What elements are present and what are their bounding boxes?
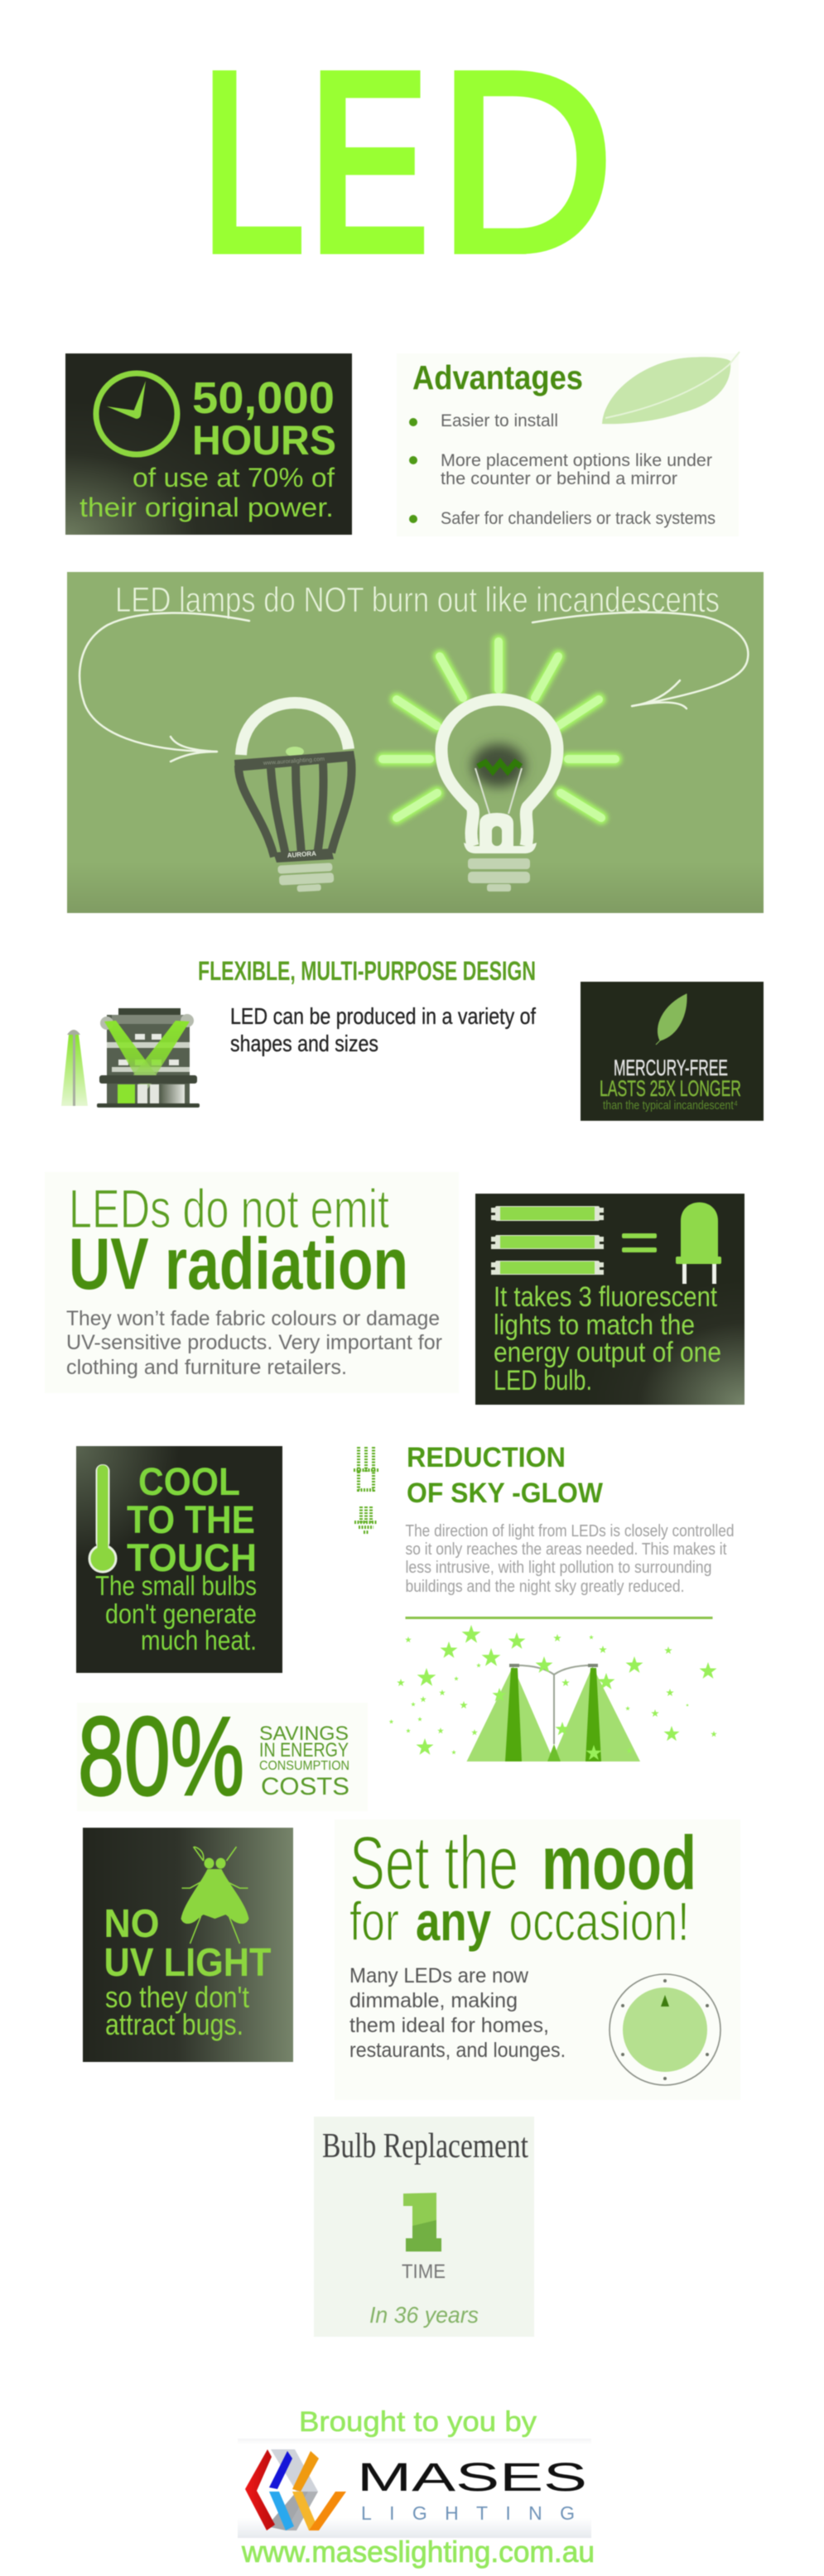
text: savings in energy consumption costs: SAVINGS <box>259 1723 349 1745</box>
text: don't attract bugs: attract bugs. <box>105 2007 243 2041</box>
panel: cool to the touch <box>76 1446 282 1673</box>
heading: for any occasion: occasion! <box>508 1891 689 1952</box>
panel: no UV radiation <box>45 1172 459 1393</box>
text: sky-glow body: less intrusive, with light pollution to surrounding <box>406 1559 712 1577</box>
text: in 36 years: In 36 years <box>369 2302 479 2328</box>
text: dimmable body: Many LEDs are now <box>349 1964 529 1987</box>
heading: no UV light: UV LIGHT <box>104 1941 272 1985</box>
list: advantages: Easier to install <box>441 411 558 430</box>
icon: equals sign <box>622 1233 657 1252</box>
text: UV body <box>66 1307 442 1379</box>
text: don't attract bugs <box>105 1980 249 2041</box>
heading: reduction of sky-glow: REDUCTION <box>407 1442 566 1473</box>
panel: flexible multi-purpose design <box>61 956 536 1108</box>
stat: 50,000 hours: 50,000 <box>192 373 335 423</box>
heading: for any occasion: for <box>349 1891 399 1952</box>
text: small bulbs <box>95 1570 257 1656</box>
stat: 50,000 hours: HOURS <box>192 417 336 464</box>
text: savings in energy consumption costs: COSTS <box>261 1773 349 1800</box>
stat: 80%: 80% <box>78 1694 244 1819</box>
title: LED: E <box>306 12 432 313</box>
list: advantages: More placement options like under <box>441 451 712 470</box>
heading: LEDs do not emit: LEDs do not emit <box>69 1178 389 1239</box>
text: small bulbs: The small bulbs <box>95 1570 257 1601</box>
heading: cool to the touch: COOL <box>138 1459 240 1503</box>
logo mark <box>245 2449 346 2530</box>
text: than the typical incandescent: than the typical incandescent⁴ <box>603 1098 738 1113</box>
text: savings in energy consumption costs: IN ENERGY <box>259 1739 349 1761</box>
text: dimmable body: dimmable, making <box>349 1989 518 2012</box>
panel: 50,000 hours <box>65 353 352 535</box>
heading: set the mood: mood <box>542 1821 696 1906</box>
icon: dimmer dial <box>610 1974 720 2085</box>
text: lasts 25x longer: LASTS 25X LONGER <box>600 1076 741 1101</box>
icon: fluorescent tubes <box>491 1206 604 1275</box>
panel: 80% savings <box>77 1694 368 1819</box>
text: mercury-free: MERCURY-FREE <box>614 1055 728 1080</box>
stat: number 1 <box>403 2193 441 2252</box>
panel: LED lamps do not burn out <box>67 572 764 913</box>
panel: mercury-free <box>581 982 764 1121</box>
list: advantages: Safer for chandeliers or track systems <box>441 509 716 528</box>
icon: leaf <box>656 994 687 1045</box>
icon: street lamp <box>61 1030 88 1106</box>
panel: set the mood <box>335 1819 740 2100</box>
heading: cool to the touch: TO THE <box>127 1497 255 1541</box>
icon: clock <box>96 373 177 454</box>
logo wordmark: MASES <box>357 2456 587 2500</box>
icon: lit building <box>97 1008 200 1108</box>
text: sky-glow body: The direction of light from LEDs is closely controlled <box>406 1522 734 1540</box>
heading: cool to the touch: TOUCH <box>127 1536 257 1579</box>
list: advantages <box>409 411 716 528</box>
heading: no UV light: NO <box>104 1902 159 1946</box>
text: fluorescent comparison: It takes 3 fluorescent <box>494 1281 717 1313</box>
heading: for any occasion <box>349 1891 689 1952</box>
text: fluorescent comparison: energy output of one <box>494 1337 721 1368</box>
text: small bulbs: much heat. <box>141 1625 257 1656</box>
heading: set the mood <box>349 1821 696 1906</box>
text: dimmable body: them ideal for homes, <box>349 2014 549 2037</box>
panel: no UV light <box>83 1828 293 2062</box>
title: LED: D <box>437 17 614 305</box>
heading: no UV light <box>104 1902 272 1985</box>
heading: advantages: Advantages <box>412 358 583 396</box>
text: dimmable body <box>349 1964 566 2062</box>
panel: 3 fluorescent lights <box>475 1194 744 1405</box>
icon: LED diode <box>676 1202 721 1284</box>
text: savings in energy consumption costs: CONSUMPTION <box>259 1759 349 1773</box>
panel: advantages <box>397 352 740 536</box>
heading: reduction of sky-glow <box>407 1442 604 1509</box>
text: fluorescent comparison: LED bulb. <box>494 1365 592 1396</box>
title: LED: L <box>200 12 308 313</box>
text: dimmable body: restaurants, and lounges. <box>349 2039 566 2062</box>
arrow: right curve <box>532 613 748 709</box>
text: UV body: UV-sensitive products. Very important for <box>66 1331 442 1354</box>
logo: Mases Lighting <box>238 2439 591 2538</box>
text: sky-glow body <box>406 1522 734 1596</box>
heading: UV radiation: UV radiation <box>69 1223 408 1305</box>
icon: LED bulb: AURORA <box>287 850 316 859</box>
text: don't attract bugs: so they don't <box>105 1980 249 2014</box>
icon: LED bulb <box>234 703 355 893</box>
icon: thermometer <box>89 1465 116 1572</box>
text: UV body: clothing and furniture retailers. <box>66 1356 347 1379</box>
text: shapes and sizes: LED can be produced in a variety of <box>230 1003 536 1029</box>
illustration: street light and stars <box>389 1625 717 1761</box>
icon: LED bulb: www.auroralighting.com <box>263 757 325 767</box>
heading: cool to the touch <box>127 1459 257 1579</box>
text: shapes and sizes <box>230 1003 536 1056</box>
glow rays <box>383 642 615 818</box>
stat: 50,000 hours <box>192 373 336 464</box>
text: savings in energy consumption costs <box>259 1723 349 1800</box>
title: LED <box>200 12 614 313</box>
text: shapes and sizes: shapes and sizes <box>230 1031 378 1056</box>
text: of use at 70%: of use at 70% of <box>133 463 335 493</box>
text: of use at 70%: their original power. <box>80 493 334 522</box>
logo tagline: LIGHTING <box>361 2502 575 2524</box>
footer: brought to you by: Brought to you by <box>299 2406 537 2438</box>
icon: dotted arrows <box>354 1447 379 1532</box>
text: time: TIME <box>402 2261 446 2283</box>
panel: bulb replacement <box>314 2117 534 2337</box>
text: sky-glow body: so it only reaches the areas needed. This makes it <box>406 1540 727 1559</box>
text: small bulbs: don't generate <box>105 1598 257 1629</box>
text: of use at 70% <box>80 463 335 522</box>
icon: glowing incandescent bulb <box>383 642 615 892</box>
heading: flexible design: FLEXIBLE, MULTI-PURPOSE DESIGN <box>198 956 536 986</box>
text: fluorescent comparison: lights to match the <box>494 1310 695 1341</box>
text: sky-glow body: buildings and the night sky greatly reduced. <box>406 1578 684 1596</box>
heading: for any occasion: any <box>416 1891 491 1952</box>
icon: fly <box>181 1847 248 1944</box>
heading: set the mood: Set the <box>349 1821 518 1906</box>
footer: website: www.maseslighting.com.au <box>241 2535 595 2569</box>
text: fluorescent comparison <box>494 1281 721 1396</box>
heading: bulb replacement: Bulb Replacement <box>322 2127 528 2165</box>
arrow: left curve <box>80 613 249 762</box>
heading: reduction of sky-glow: OF SKY -GLOW <box>407 1478 604 1509</box>
icon: feather <box>602 352 740 424</box>
panel: reduction of sky-glow <box>354 1442 734 1761</box>
list: advantages: the counter or behind a mirror <box>441 469 677 488</box>
text: UV body: They won’t fade fabric colours or damage <box>66 1307 440 1330</box>
